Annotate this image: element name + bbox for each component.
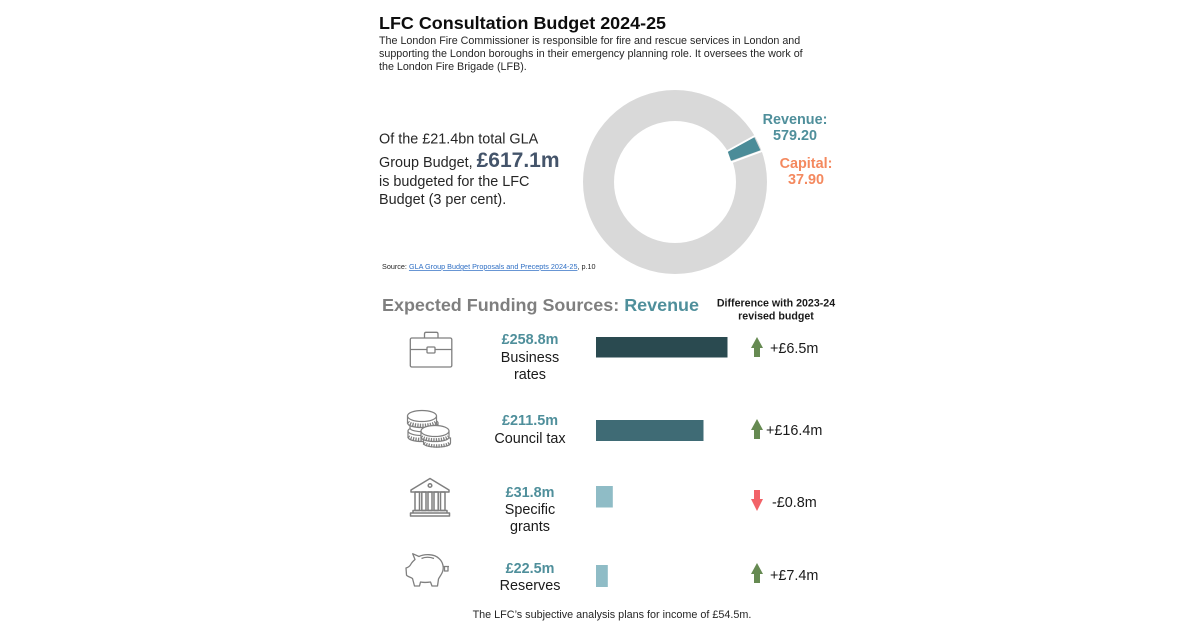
- label: capital: [780, 156, 832, 188]
- icon: coins: [408, 410, 450, 447]
- source note: Source: GLA Group Budget Proposals and Precepts 2024-25, p.10: [382, 262, 596, 271]
- bar: reserves: [596, 565, 608, 587]
- label: revenue: [763, 112, 827, 144]
- row: council tax: Council tax: [494, 431, 566, 447]
- row: specific grants: Specific: [505, 502, 555, 518]
- budget statement: [379, 132, 560, 208]
- difference column heading: Difference with 2023-24: [717, 298, 835, 310]
- bar: business rates: [596, 337, 728, 358]
- row: council tax: £211.5m: [502, 413, 558, 429]
- intro text: supporting the London boroughs in their emergency planning role. It oversees the work of: [379, 48, 803, 60]
- arrow: up: [751, 563, 763, 583]
- row: business rates: £258.8m: [502, 332, 558, 348]
- change: council tax: +£16.4m: [766, 423, 822, 439]
- row: reserves: [500, 561, 560, 594]
- row: council tax: [494, 413, 566, 447]
- label: revenue: Revenue:: [763, 112, 827, 128]
- label: capital: 37.90: [788, 172, 824, 188]
- intro text: the London Fire Brigade (LFB).: [379, 61, 527, 73]
- bar: specific grants: [596, 486, 613, 508]
- section heading: Expected Funding Sources: Revenue: [382, 295, 699, 315]
- row: business rates: rates: [514, 367, 546, 383]
- row: specific grants: [505, 485, 555, 535]
- row: specific grants: grants: [510, 519, 550, 535]
- intro text: The London Fire Commissioner is responsible for fire and rescue services in London and: [379, 35, 800, 47]
- arrow: up: [751, 337, 763, 357]
- icon: bank: [410, 478, 450, 516]
- label: capital: Capital:: [780, 156, 832, 172]
- row: business rates: [501, 332, 559, 383]
- row: reserves: £22.5m: [506, 561, 554, 577]
- change: business rates: +£6.5m: [770, 341, 818, 357]
- title: LFC Consultation Budget 2024-25: [379, 13, 666, 33]
- row: reserves: Reserves: [500, 578, 560, 594]
- label: revenue: 579.20: [773, 128, 817, 144]
- arrow: up: [751, 419, 763, 439]
- row: specific grants: £31.8m: [506, 485, 554, 501]
- donut chart: [598, 106, 763, 258]
- change: specific grants: -£0.8m: [772, 495, 817, 511]
- intro text: [379, 35, 803, 73]
- difference column heading: [717, 298, 835, 322]
- change: reserves: +£7.4m: [770, 568, 818, 584]
- revenue/capital wedge: [728, 137, 760, 161]
- row: business rates: Business: [501, 350, 559, 366]
- footer note: The LFC’s subjective analysis plans for income of £54.5m.: [473, 609, 751, 621]
- icon: briefcase: [410, 332, 452, 367]
- icon: piggy bank: [406, 554, 449, 586]
- budget statement: Of the £21.4bn total GLA: [379, 132, 539, 148]
- difference column heading: revised budget: [738, 310, 814, 322]
- budget statement: Budget (3 per cent).: [379, 192, 506, 208]
- budget statement: is budgeted for the LFC: [379, 174, 529, 190]
- arrow: down: [751, 490, 763, 511]
- budget statement: Group Budget, £617.1m: [379, 149, 560, 172]
- bar: council tax: [596, 420, 704, 441]
